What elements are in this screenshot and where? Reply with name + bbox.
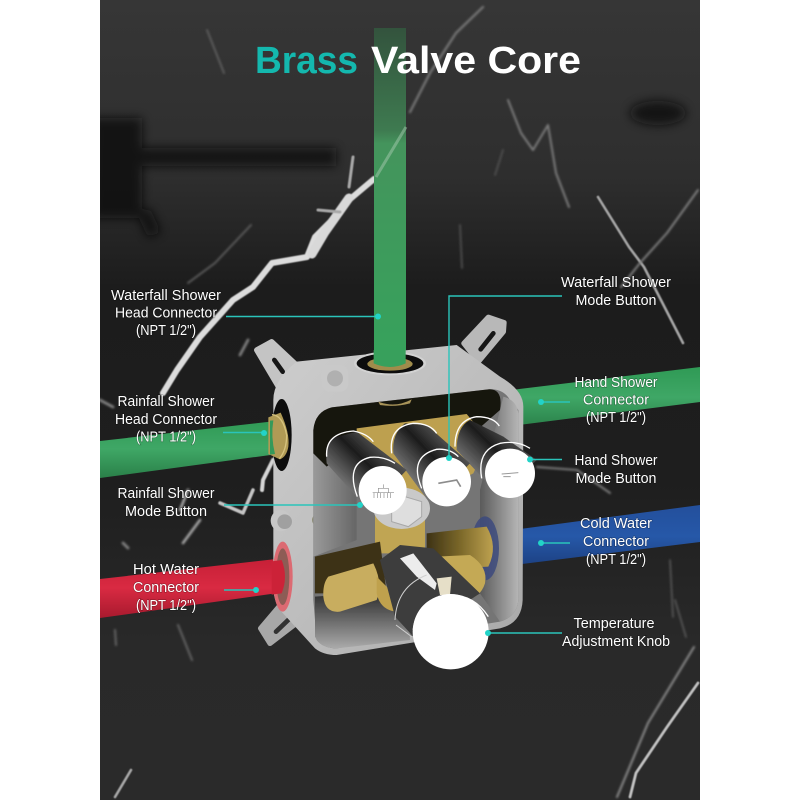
- valve box illustration: [257, 317, 537, 669]
- opening: [313, 389, 518, 648]
- label: rainfall shower mode button: Mode Button: [125, 504, 207, 520]
- ear slots: [274, 333, 493, 632]
- pipe: red hot water pipe: [100, 558, 285, 618]
- side ports: [268, 365, 348, 612]
- pipe: top green waterfall pipe: [374, 28, 406, 368]
- hex nut: [373, 488, 430, 529]
- leader: rainfall shower mode button: [224, 502, 363, 508]
- label: hand shower mode button: Hand Shower: [574, 453, 658, 469]
- pipe: blue cold water pipe: [490, 505, 700, 568]
- brass body: [315, 399, 493, 612]
- label: temperature adjustment knob: Temperature: [574, 616, 654, 632]
- label: waterfall shower mode button: Mode Button: [576, 293, 656, 309]
- label: hand shower mode button: [574, 453, 658, 487]
- label: hand shower connector: Hand Shower: [574, 375, 658, 391]
- label: rainfall shower mode button: Rainfall Shower: [118, 486, 215, 502]
- label: cold water connector: [580, 516, 652, 568]
- label: hand shower connector: [574, 375, 658, 426]
- label: rainfall shower mode button: [118, 486, 215, 520]
- leader: hot water connector: [224, 587, 259, 593]
- label: cold water connector: (NPT 1/2"): [586, 552, 646, 568]
- label: hand shower connector: Connector: [583, 392, 649, 408]
- chrome button: hand shower: [455, 417, 537, 498]
- top port ring: [354, 350, 426, 375]
- label: waterfall shower mode button: Waterfall Shower: [561, 275, 671, 291]
- label: waterfall shower head connector: (NPT 1/2"): [136, 323, 196, 339]
- label: rainfall shower head connector: Head Connector: [115, 412, 217, 428]
- box body: [273, 345, 523, 655]
- label: hot water connector: Connector: [133, 580, 199, 596]
- inner walls: [313, 389, 518, 648]
- label: rainfall shower head connector: [115, 394, 217, 446]
- label: hot water connector: Hot Water: [133, 562, 199, 578]
- label: temperature adjustment knob: Adjustment Knob: [562, 634, 670, 650]
- label: cold water connector: Connector: [583, 534, 649, 550]
- label: waterfall shower head connector: Waterfall Shower: [111, 288, 221, 304]
- label: rainfall shower head connector: Rainfall Shower: [118, 394, 215, 410]
- pipe: right green pipe: [495, 367, 700, 428]
- label: rainfall shower head connector: (NPT 1/2"): [136, 430, 196, 446]
- title: Brass: [255, 40, 358, 82]
- label: hot water connector: [133, 562, 199, 614]
- pipe: left green pipe: [100, 420, 285, 478]
- chrome button: rainfall shower: [326, 431, 407, 515]
- leader: waterfall shower mode button: [446, 296, 562, 461]
- leader: waterfall shower head connector: [226, 314, 381, 320]
- label: hot water connector: (NPT 1/2"): [136, 598, 196, 614]
- leader: hand shower connector: [538, 399, 570, 405]
- leader: hand shower mode button: [527, 456, 562, 462]
- cold water port ring: [471, 516, 499, 580]
- title: [255, 40, 581, 82]
- leader: rainfall shower head connector: [223, 430, 267, 436]
- label: waterfall shower head connector: [111, 288, 221, 339]
- mounting ears: [257, 317, 504, 643]
- chrome button: waterfall shower: [391, 423, 471, 506]
- label: temperature adjustment knob: [562, 616, 670, 650]
- label: waterfall shower mode button: [561, 275, 671, 309]
- label: cold water connector: Cold Water: [580, 516, 652, 532]
- leader: temperature adjustment knob: [485, 630, 562, 636]
- label: waterfall shower head connector: Head Connector: [115, 306, 217, 322]
- label: hand shower mode button: Mode Button: [576, 471, 656, 487]
- leader: cold water connector: [538, 540, 570, 546]
- temperature knob: [380, 545, 489, 669]
- title: Valve Core: [371, 40, 581, 82]
- label: hand shower connector: (NPT 1/2"): [586, 410, 646, 426]
